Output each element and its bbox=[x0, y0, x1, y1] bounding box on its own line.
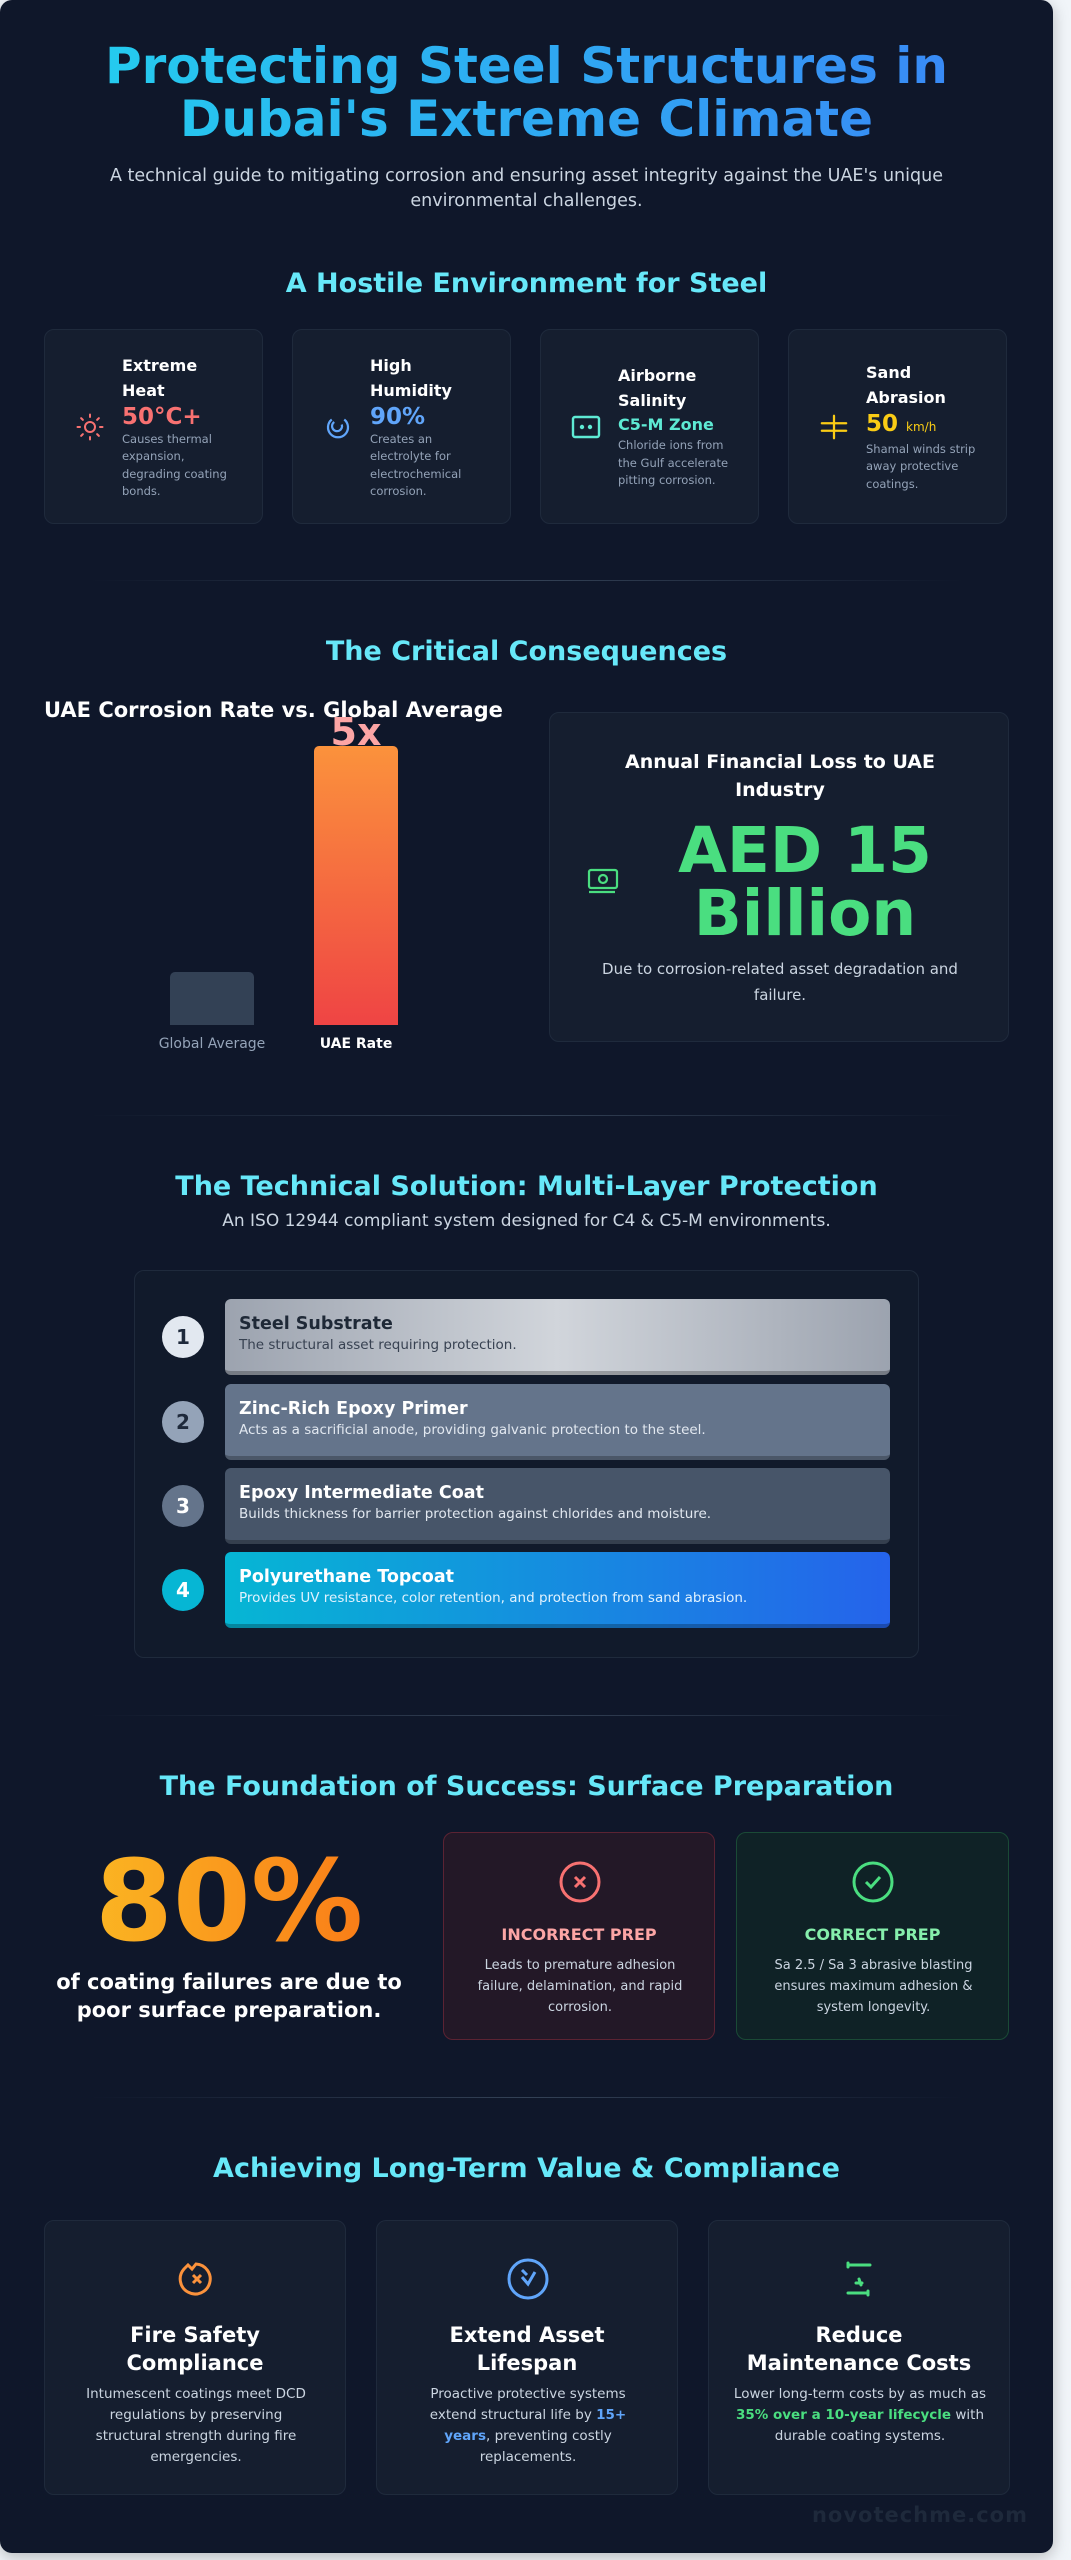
card: humidity: High Humidity bbox=[370, 356, 452, 400]
card: humidity: Creates an electrolyte for electrochemical corrosion. bbox=[370, 432, 461, 498]
bar: global bbox=[170, 972, 254, 1025]
layer 1: 1 bbox=[176, 1325, 190, 1349]
card: correct prep bbox=[736, 1832, 1009, 2040]
icon: money bbox=[588, 868, 618, 894]
chart title: UAE Corrosion Rate vs. Global Average bbox=[44, 698, 503, 722]
card: fire safety: Compliance bbox=[127, 2351, 263, 2375]
layer 2 bbox=[162, 1384, 890, 1460]
heading: technical solution: The Technical Solution: Multi-Layer Protection bbox=[175, 1171, 878, 1202]
layer 3: Epoxy Intermediate Coat bbox=[239, 1483, 484, 1503]
heading: hostile environment: A Hostile Environment for Steel bbox=[286, 268, 767, 299]
card: sand: Shamal winds strip away protective coatings. bbox=[866, 442, 975, 491]
layer 1 bbox=[162, 1299, 890, 1375]
layer 4 bbox=[162, 1552, 890, 1628]
label global: Global Average bbox=[159, 1036, 265, 1052]
card: salinity: Airborne Salinity bbox=[618, 366, 696, 410]
stat: 80%: of coating failures are due to poor surface preparation. bbox=[56, 1970, 402, 2022]
card: incorrect prep bbox=[443, 1832, 715, 2040]
icon: fire bbox=[178, 2262, 212, 2296]
big number: Billion bbox=[694, 877, 916, 950]
card: lifespan bbox=[376, 2220, 678, 2495]
card: extreme heat: Extreme Heat bbox=[122, 356, 197, 400]
card: costs: Lower long-term costs by as much as 35% over a 10-year lifecycle with durable coating systems. bbox=[734, 2386, 986, 2444]
big number: AED 15 bbox=[678, 814, 932, 887]
icon: shield check bbox=[508, 2258, 548, 2300]
watermark: novotechme.com bbox=[812, 2503, 1028, 2527]
card title: Annual Financial Loss to UAE Industry bbox=[625, 751, 935, 801]
card: sand: 50 km/h bbox=[866, 411, 936, 437]
card: correct prep: Sa 2.5 / Sa 3 abrasive blasting ensures maximum adhesion & system longevity. bbox=[774, 1958, 973, 2015]
layer 1: Steel Substrate bbox=[239, 1314, 393, 1334]
card: sand: Sand Abrasion bbox=[866, 363, 946, 407]
card: lifespan: Proactive protective systems extend structural life by 15+ years, preventing costly replacements. bbox=[430, 2386, 626, 2465]
icon: salinity bbox=[572, 416, 600, 438]
title: Protecting Steel Structures in bbox=[105, 37, 948, 95]
layer 3 bbox=[162, 1468, 890, 1544]
layer 2: Acts as a sacrificial anode, providing galvanic protection to the steel. bbox=[239, 1422, 706, 1438]
bar chart bbox=[44, 698, 503, 1052]
card: fire safety bbox=[44, 2220, 346, 2495]
layer 4: 4 bbox=[176, 1578, 190, 1602]
card: extreme heat: 50°C+ bbox=[122, 404, 202, 430]
card: financial loss bbox=[549, 712, 1009, 1042]
card: incorrect prep: Leads to premature adhesion failure, delamination, and rapid corrosion. bbox=[478, 1958, 682, 2015]
title bbox=[0, 40, 1053, 146]
card: costs: Maintenance Costs bbox=[747, 2351, 971, 2375]
heading: surface prep: The Foundation of Success: Surface Preparation bbox=[160, 1771, 893, 1802]
card: extreme heat bbox=[44, 329, 263, 524]
layer 4: Polyurethane Topcoat bbox=[239, 1567, 454, 1587]
card: costs bbox=[708, 2220, 1010, 2495]
card: salinity: C5-M Zone bbox=[618, 415, 714, 434]
card: fire safety: Fire Safety bbox=[130, 2323, 260, 2347]
subtitle: A technical guide to mitigating corrosion and ensuring asset integrity against the UAE's unique environmental challenges. bbox=[110, 166, 943, 211]
bar: uae bbox=[314, 746, 398, 1025]
label uae: UAE Rate bbox=[320, 1036, 392, 1052]
layer 3: Builds thickness for barrier protection against chlorides and moisture. bbox=[239, 1506, 711, 1522]
layer 2: 2 bbox=[176, 1410, 190, 1434]
card: extreme heat: Causes thermal expansion, degrading coating bonds. bbox=[122, 432, 227, 498]
icon: check circle bbox=[852, 1862, 894, 1902]
layer 2: Zinc-Rich Epoxy Primer bbox=[239, 1399, 468, 1419]
card: humidity bbox=[292, 329, 511, 524]
heading: long-term value: Achieving Long-Term Value & Compliance bbox=[213, 2153, 840, 2184]
layer 4: Provides UV resistance, color retention, and protection from sand abrasion. bbox=[239, 1590, 747, 1606]
big number bbox=[678, 814, 932, 950]
layer 3: 3 bbox=[176, 1494, 190, 1518]
title: Dubai's Extreme Climate bbox=[180, 90, 873, 148]
card: lifespan: Lifespan bbox=[477, 2351, 577, 2375]
icon: wind bbox=[820, 414, 848, 440]
card: fire safety: Intumescent coatings meet DCD regulations by preserving structural strength during fire emergencies. bbox=[86, 2386, 306, 2465]
subtitle: iso: An ISO 12944 compliant system designed for C4 & C5-M environments. bbox=[222, 1211, 831, 1231]
card: costs: Reduce bbox=[815, 2323, 903, 2347]
card: lifespan: Extend Asset bbox=[450, 2323, 604, 2347]
card: sand bbox=[788, 329, 1007, 524]
icon: humidity bbox=[326, 418, 350, 438]
icon: sun bbox=[76, 414, 104, 440]
description: Due to corrosion-related asset degradation and failure. bbox=[602, 960, 958, 1004]
label 5x: 5x bbox=[331, 710, 381, 754]
stat: 80%: 80% bbox=[95, 1837, 363, 1967]
icon: x circle bbox=[560, 1862, 600, 1902]
card: correct prep: CORRECT PREP bbox=[805, 1925, 940, 1944]
card: salinity: Chloride ions from the Gulf accelerate pitting corrosion. bbox=[618, 438, 728, 487]
panel: layers bbox=[134, 1270, 919, 1658]
stat: 80% bbox=[56, 1837, 402, 2022]
heading: consequences: The Critical Consequences bbox=[326, 636, 727, 667]
layer 1: The structural asset requiring protection. bbox=[239, 1337, 517, 1353]
icon: costs bbox=[846, 2262, 872, 2296]
card: salinity bbox=[540, 329, 759, 524]
card: humidity: 90% bbox=[370, 404, 425, 430]
card: incorrect prep: INCORRECT PREP bbox=[501, 1925, 657, 1944]
